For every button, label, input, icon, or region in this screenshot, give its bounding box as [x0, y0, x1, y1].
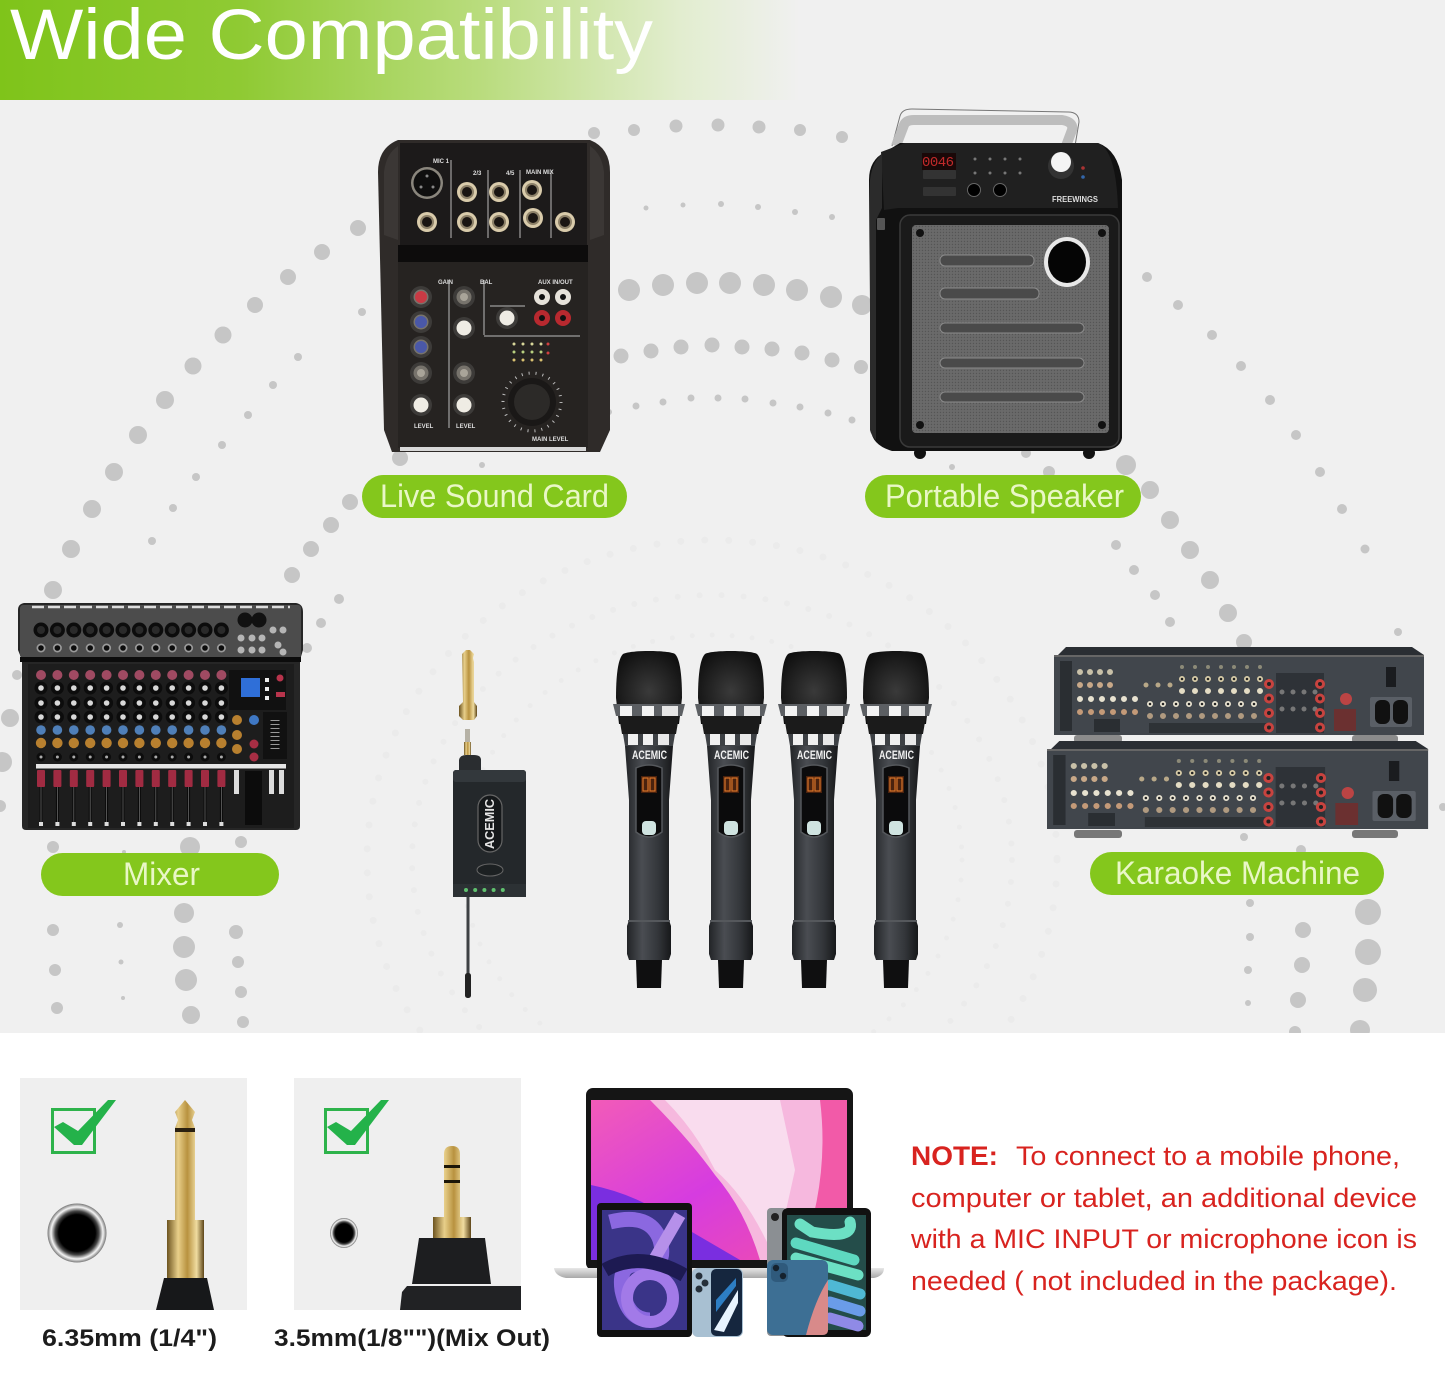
icon: checkbox	[52, 1100, 116, 1152]
note: computer or tablet, an additional device	[911, 1183, 1417, 1213]
icon: jack hole	[48, 1204, 106, 1262]
device: live sound card: BAL	[480, 280, 493, 286]
label: 6.35mm: 6.35mm (1/4")	[42, 1325, 217, 1352]
device: portable speaker: 0046	[922, 155, 954, 171]
device: live sound card	[378, 140, 610, 452]
phone left	[692, 1268, 743, 1337]
note: To connect to a mobile phone,	[1016, 1141, 1400, 1171]
device: live sound card: LEVEL	[456, 424, 476, 430]
device: live sound card: MIC 1	[433, 159, 450, 165]
icon: 3.5mm plug	[400, 1146, 521, 1310]
note: needed ( not included in the package).	[911, 1266, 1397, 1296]
devices: laptop, tablets and phones	[554, 1088, 884, 1337]
device: live sound card: LEVEL	[414, 424, 434, 430]
phone right	[767, 1260, 828, 1335]
device: wireless receiver with adapter: ACEMIC	[482, 798, 497, 849]
label: portable speaker: Portable Speaker	[885, 478, 1124, 514]
note: with a MIC INPUT or microphone icon is	[910, 1224, 1417, 1254]
microphones: ACEMIC	[797, 748, 832, 762]
microphones	[613, 651, 932, 988]
device: mixer	[18, 603, 303, 830]
device: live sound card: 2/3	[473, 171, 482, 177]
microphones: ACEMIC	[632, 748, 667, 762]
laptop	[554, 1088, 884, 1278]
label: mixer	[41, 853, 279, 896]
device: live sound card: MAIN MIX	[526, 170, 554, 176]
microphones: ACEMIC	[714, 748, 749, 762]
icon: 6.35mm plug	[156, 1100, 214, 1310]
microphones: ACEMIC	[879, 748, 914, 762]
icon: jack hole	[330, 1218, 358, 1248]
device: karaoke machine	[1047, 647, 1428, 838]
bottom white section	[0, 1033, 1445, 1376]
header banner	[0, 0, 800, 100]
device: portable speaker	[869, 109, 1122, 459]
icon: checkbox	[326, 1100, 389, 1152]
note	[910, 1141, 1417, 1296]
panel: 3.5mm jack	[294, 1078, 521, 1310]
note: NOTE:	[911, 1141, 998, 1171]
label: karaoke machine: Karaoke Machine	[1115, 855, 1360, 891]
label: mixer: Mixer	[123, 856, 200, 892]
label: 3.5mm: 3.5mm(1/8"")(Mix Out)	[274, 1325, 550, 1352]
device: portable speaker: FREEWINGS	[1052, 195, 1099, 204]
tablet left	[597, 1203, 692, 1337]
device: live sound card: AUX IN/OUT	[538, 280, 573, 286]
panel: 6.35mm jack	[20, 1078, 247, 1310]
device: wireless receiver with adapter	[453, 650, 526, 998]
label: live sound card: Live Sound Card	[380, 478, 609, 514]
device: live sound card: MAIN LEVEL	[532, 437, 569, 443]
background dot rings	[0, 118, 1445, 1180]
device: live sound card: 4/5	[506, 171, 515, 177]
background panel	[0, 0, 1445, 1033]
tablet right	[767, 1208, 871, 1337]
device: live sound card: GAIN	[438, 280, 453, 286]
